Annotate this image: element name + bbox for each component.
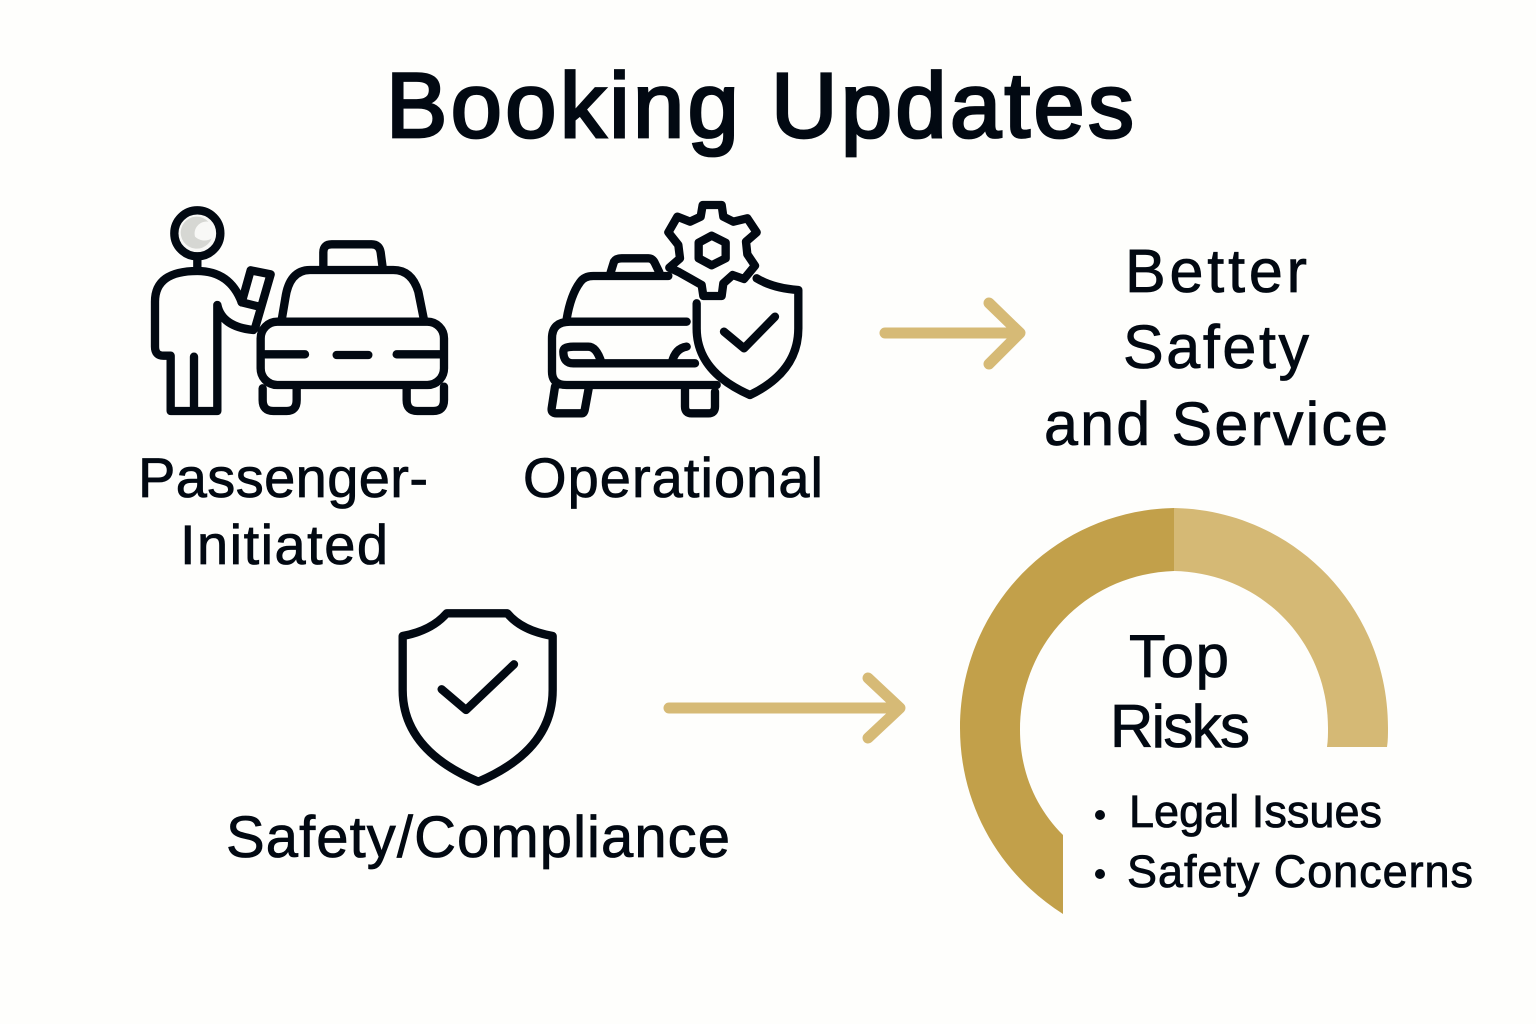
text: better safety and service: and Service: [1044, 390, 1388, 458]
list: risks: Safety Concerns: [1127, 846, 1473, 897]
icon: passenger with taxi: [155, 210, 444, 411]
taxi wheels: [263, 387, 444, 411]
gear hub: [699, 236, 726, 265]
label: passenger-initiated: Passenger-: [138, 446, 428, 509]
donut chart: top risks: [960, 508, 1388, 914]
taxi outline: [552, 258, 717, 413]
passenger head: [174, 210, 220, 256]
shield outline: [697, 278, 798, 395]
arrow: to top risks: [669, 678, 900, 738]
heading: top risks: Top: [1129, 623, 1229, 690]
passenger phone: [242, 270, 271, 328]
taxi roof sign: [323, 244, 383, 268]
label: safety/compliance: Safety/Compliance: [226, 805, 730, 870]
passenger body: [155, 258, 253, 411]
heading: top risks: [1110, 623, 1250, 760]
taxi headlight lines: [265, 342, 442, 367]
text: better safety and service: [1044, 237, 1388, 458]
title: Booking Updates: [386, 55, 1134, 157]
taxi cabin: [282, 270, 424, 320]
donut light segment: [1174, 508, 1388, 747]
heading: top risks: Risks: [1110, 693, 1250, 760]
label: passenger-initiated: Initiated: [180, 513, 388, 576]
label: passenger-initiated: [138, 446, 428, 576]
list: risks: [1095, 786, 1473, 897]
icon: taxi with gear and shield: [552, 205, 798, 413]
text: better safety and service: Safety: [1123, 313, 1310, 381]
arrow: to better safety: [885, 303, 1020, 364]
taxi body: [261, 322, 444, 385]
icon: shield with check: [403, 613, 553, 782]
shield fill: [697, 278, 798, 395]
label: operational: Operational: [523, 446, 823, 509]
list: risks: Legal Issues: [1129, 786, 1382, 837]
text: better safety and service: Better: [1125, 237, 1307, 305]
gear: [668, 205, 757, 296]
donut dark segment: [960, 508, 1174, 914]
shield check: [724, 317, 775, 348]
